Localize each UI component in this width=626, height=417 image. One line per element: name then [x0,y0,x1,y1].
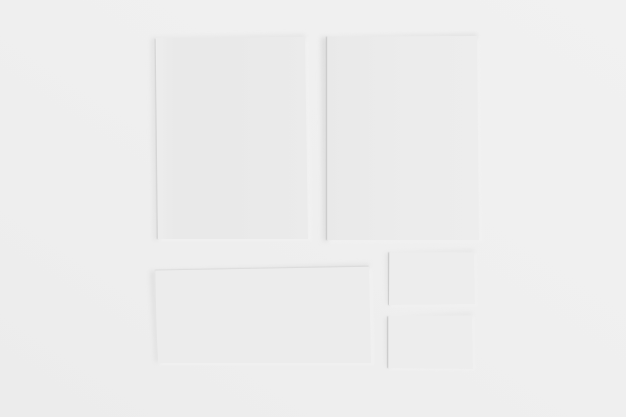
left folded sheet [151,35,312,241]
bottom business card [385,313,475,370]
top business card [386,250,477,307]
envelope [150,264,374,365]
right folded sheet [321,34,483,243]
